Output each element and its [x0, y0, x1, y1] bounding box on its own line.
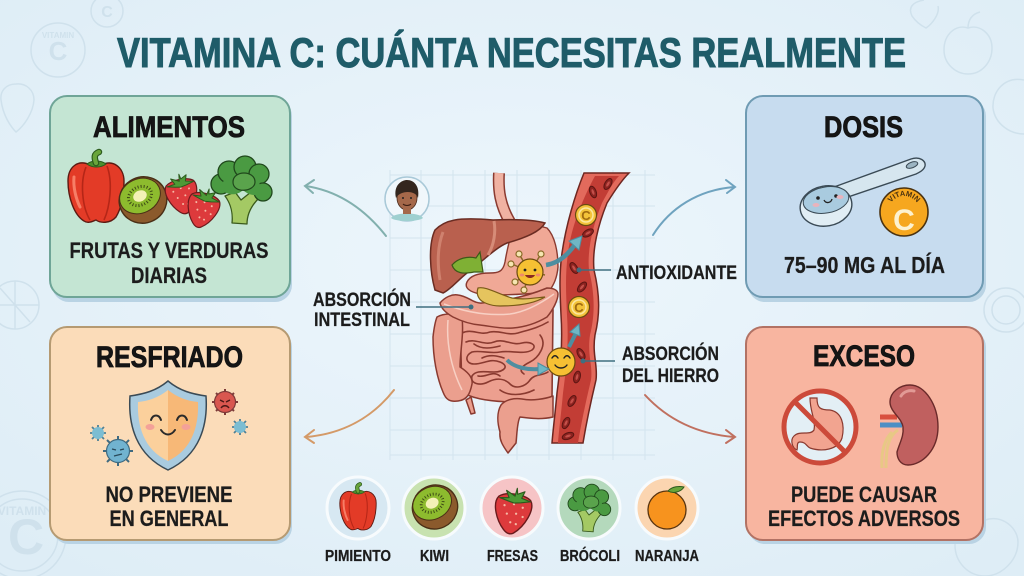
arrow: stomach to blood: [546, 236, 582, 265]
esophagus inner: [499, 173, 510, 222]
panel: dosis: [745, 95, 986, 302]
icon: food group: [68, 152, 272, 231]
arrow: to exceso: [645, 395, 735, 443]
gallbladder: [452, 252, 483, 273]
heading: alimentos: ALIMENTOS: [93, 111, 245, 144]
fruit: kiwi: KIWI: [420, 548, 449, 565]
large intestine: [433, 288, 558, 453]
stomach: [466, 224, 558, 295]
panel text: 75–90 MG AL DÍA: [784, 251, 945, 278]
heading: dosis: DOSIS: [824, 111, 903, 144]
callout: absorción intestinal: INTESTINAL: [314, 310, 410, 331]
anatomy: digestive system and blood vessel: [430, 173, 629, 453]
liver: [430, 219, 545, 293]
blood vessel: [552, 173, 629, 443]
heading: resfriado: RESFRIADO: [96, 341, 243, 374]
grid behind anatomy: [390, 170, 655, 460]
fruit: naranja: NARANJA: [635, 548, 699, 565]
icon: vitamin c coin: [879, 187, 929, 237]
transverse colon: [440, 288, 558, 328]
callout: absorción del hierro: [580, 343, 719, 387]
fruit: kiwi: [403, 477, 465, 565]
decorative vitamin C letters: C: [49, 36, 68, 66]
callout: absorción del hierro: DEL HIERRO: [622, 366, 719, 387]
arrow: to alimentos: [305, 180, 386, 236]
decorative vitamin C letters: C: [101, 4, 113, 21]
icon: prohibited stomach: [784, 391, 856, 463]
icon: vitamin c coins in vessel: [568, 204, 596, 318]
icon: person avatar: [385, 177, 429, 221]
fruit: naranja: [635, 477, 699, 565]
callout: absorción intestinal: ABSORCIÓN: [313, 289, 411, 311]
icon: happy vitamin molecule lower: [547, 348, 575, 376]
fruit: fresas: [481, 477, 543, 565]
appendix: [466, 397, 475, 414]
panel text second line: DIARIAS: [131, 263, 207, 288]
fruit: pimiento: PIMIENTO: [325, 548, 391, 565]
panel text second line: EFECTOS ADVERSOS: [768, 506, 960, 531]
fruit: pimiento: [325, 477, 391, 565]
panel text second line: EN GENERAL: [110, 506, 228, 531]
decorative vitamin C letters: [0, 4, 113, 565]
panel text: PUEDE CAUSAR: [791, 482, 937, 507]
arrow: intestine to molecule: [507, 360, 549, 375]
callout: absorción intestinal: [313, 289, 474, 331]
arrow: molecule up vessel: [569, 324, 580, 347]
decorative vitamin C letters: C: [8, 509, 44, 565]
ascending colon: [433, 314, 472, 401]
fruit: brócoli: [558, 477, 620, 565]
heading: exceso: EXCESO: [813, 340, 915, 373]
panel: alimentos: [50, 96, 292, 302]
fruit: fresas: FRESAS: [487, 548, 538, 565]
icon: vitamin c coins in vessel: C: [581, 208, 591, 223]
descending colon and rectum: [498, 396, 553, 453]
panel text: NO PREVIENE: [106, 482, 232, 507]
esophagus: [499, 173, 510, 222]
icon: kidney: [880, 385, 938, 468]
icon: measuring spoon: [797, 158, 925, 230]
panel: resfriado: [50, 327, 292, 544]
icon: vitamin c coins in vessel: C: [574, 300, 584, 315]
icon: small blue viruses: [90, 419, 248, 466]
decorative vitamin C letters: VITAMIN: [42, 31, 74, 40]
icon: red virus: [212, 389, 238, 415]
icon: shield with face: [130, 381, 206, 470]
icon: happy vitamin molecule upper: [508, 251, 545, 293]
icon: vitamin c coin: VITAMIN: [887, 190, 920, 202]
panel: exceso: [746, 327, 986, 544]
arrow: to resfriado: [305, 390, 394, 443]
callout: antioxidante: [576, 263, 737, 284]
panel text: FRUTAS Y VERDURAS: [70, 238, 268, 263]
fruit: brócoli: BRÓCOLI: [560, 547, 620, 565]
small intestine: [460, 310, 553, 402]
arrow: to dosis: [653, 180, 735, 235]
callout: antioxidante: ANTIOXIDANTE: [616, 263, 737, 284]
icon: vitamin c coin: C: [893, 204, 915, 237]
callout: absorción del hierro: ABSORCIÓN: [622, 343, 719, 365]
pancreas: [477, 288, 545, 306]
